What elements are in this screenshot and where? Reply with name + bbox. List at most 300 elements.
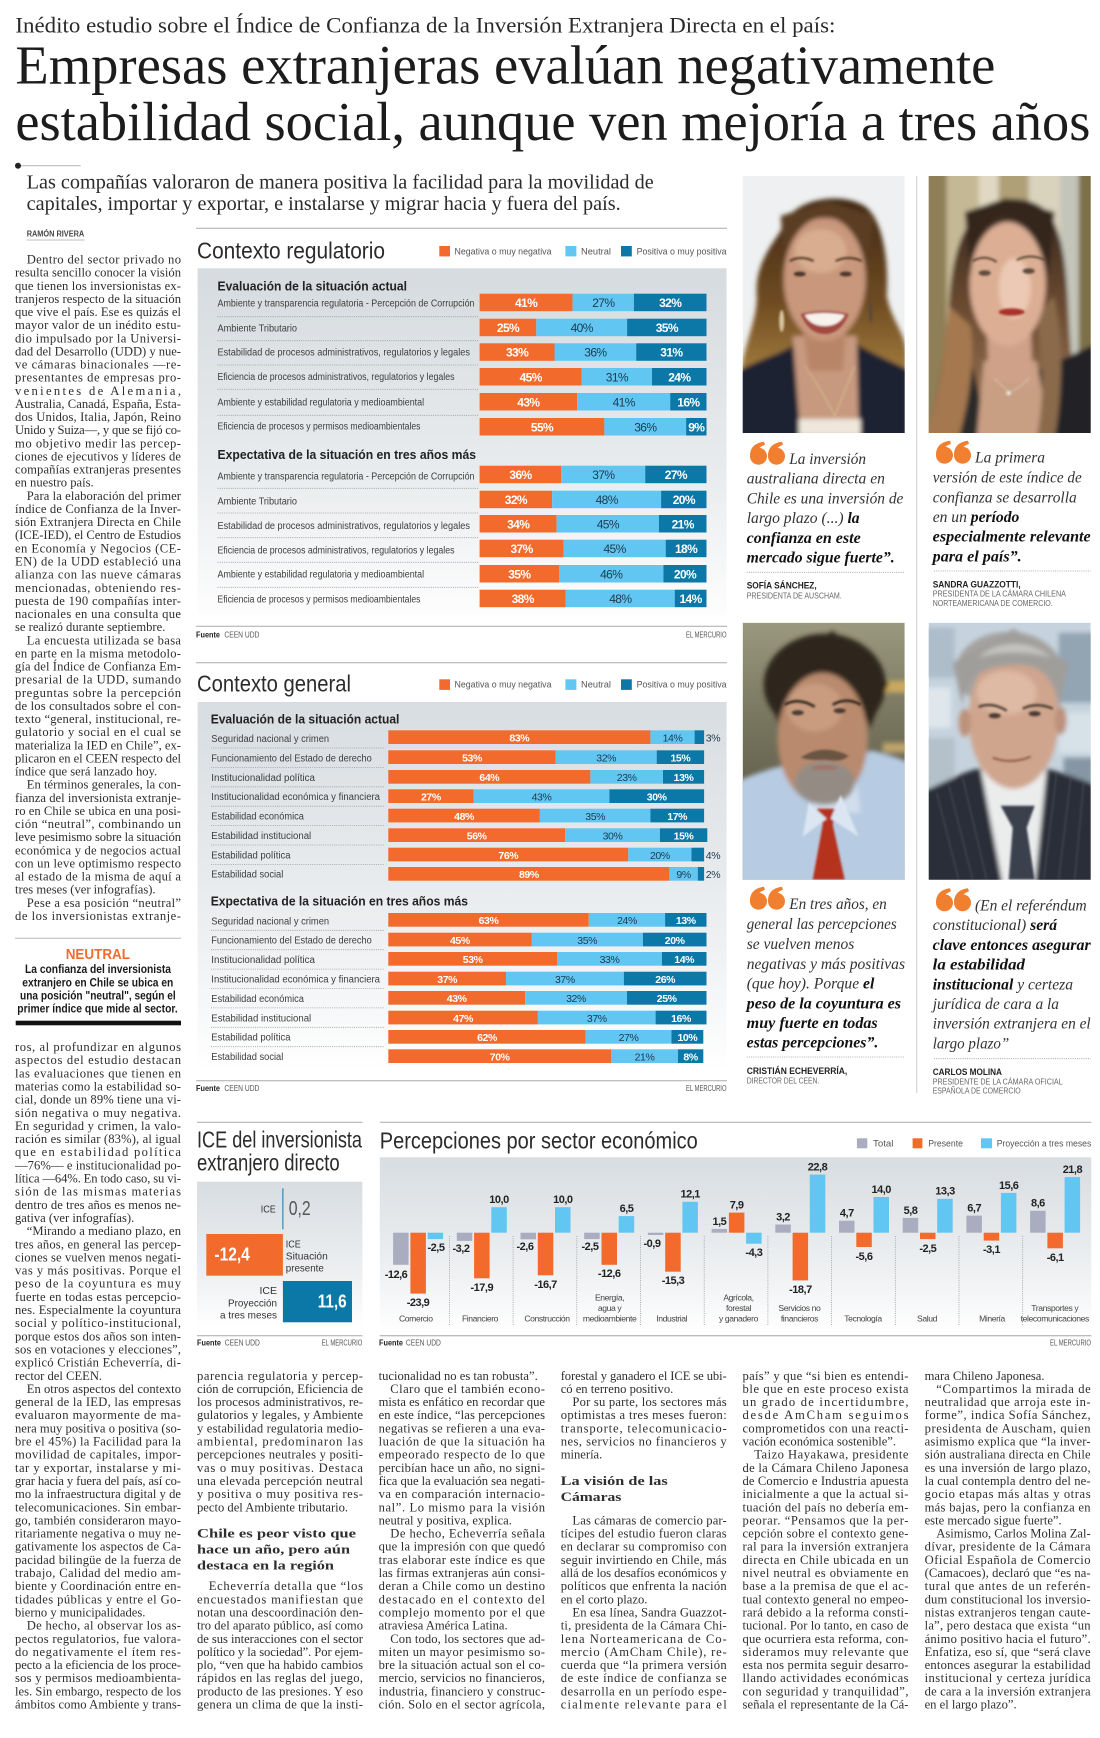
article column 6: Enfatiza, eso sí, que “será clave — [925, 1645, 1091, 1659]
article column 1, top: dio impulsado por la Universi- — [15, 331, 181, 345]
stacked bars: evaluación actual: 89% — [519, 869, 540, 881]
article column 2: tro del aparato público, así como — [197, 1619, 363, 1633]
article column 2: gulatorios y legales, y Ambiente — [197, 1408, 363, 1422]
quote: Cristián Echeverría: muy fuerte en todas — [747, 1015, 878, 1032]
article column 1, top: presentantes de empresas pro- — [15, 371, 181, 385]
category labels: agua y — [598, 1303, 622, 1313]
quote: Carlos Molina: CARLOS MOLINA — [933, 1067, 1002, 1077]
quote: Carlos Molina: institucional y certeza — [933, 976, 1073, 993]
category labels: Servicios no — [778, 1303, 821, 1313]
article column 4: cialmente relevante para el — [561, 1698, 727, 1712]
quote: Cristián Echeverría: peso de la coyuntura es — [745, 995, 901, 1012]
article column 2: parencia regulatoria y percep- — [197, 1369, 363, 1383]
value labels: -4,3 — [745, 1247, 763, 1259]
stacked bars: expectativa: 16% — [671, 1013, 692, 1025]
article column 5: rará debido a la reforma consti- — [742, 1606, 908, 1620]
article column 1, top: ciones de ejecutivos y líderes de — [15, 450, 181, 464]
article column 6 — [925, 1369, 1091, 1712]
category labels: Financiero — [462, 1313, 499, 1323]
stacked bars: expectativa: 32% — [566, 993, 586, 1005]
value labels — [385, 1162, 1082, 1309]
stacked bars: evaluación actual: 43% — [532, 792, 551, 804]
stacked bars: expectativa: 36% — [509, 468, 533, 482]
quote: Cristián Echeverría: En tres años, en — [788, 896, 887, 913]
stacked bars: expectativa: 25% — [657, 993, 678, 1005]
article column 5: señala el representante de la Cá- — [742, 1698, 908, 1712]
stacked bars: evaluación actual: 45% — [520, 370, 543, 384]
value labels: 21,8 — [1063, 1164, 1082, 1176]
photo: Cristián Echeverría — [739, 623, 909, 885]
row labels: evaluación actual: Institucionalidad política — [211, 773, 315, 784]
quote: Carlos Molina: constitucional) será — [933, 917, 1057, 934]
article column 1, top: venientes de Alemania, — [15, 384, 181, 398]
article column 1, top: preguntas sobre la percepción — [15, 686, 182, 700]
article column 1, bottom: ros, al profundizar en algunos — [15, 1040, 181, 1054]
row labels: evaluación actual: Ambiente Tributario — [218, 324, 297, 335]
source line — [197, 1339, 362, 1348]
row labels: evaluación actual: Ambiente y transparencia regulatoria - Percepción de Corrupción — [218, 299, 474, 310]
article column 3 — [379, 1369, 546, 1712]
row labels: evaluación actual: Eficiencia de procesos administrativos, regulatorios y legales — [218, 372, 454, 383]
stacked bars: evaluación actual: 31% — [660, 346, 683, 360]
article column 6: neutralidad que arroja este in- — [925, 1395, 1091, 1409]
photo: Sofía Sánchez — [739, 176, 909, 438]
article column 1, top: alianza con las nueve cámaras — [15, 568, 181, 582]
source line: Fuente — [196, 630, 220, 639]
row labels: expectativa: Estabilidad de procesos administrativos, regulatorios y legales — [218, 521, 470, 532]
article column 1, top: ro en Chile se ubica en una posi- — [15, 804, 181, 818]
panel: contexto regulatorio — [196, 228, 727, 639]
stacked bars: expectativa: 37% — [587, 1013, 607, 1025]
stacked bars: evaluación actual: 9% — [688, 420, 705, 434]
legend — [857, 1138, 1092, 1148]
article column 2: y estabilidad regulatoria medio- — [197, 1421, 363, 1435]
panel: ICE del inversionista — [197, 1122, 362, 1348]
article column 2: ambiental, predominaron las — [197, 1434, 363, 1448]
stacked bars: expectativa: 45% — [603, 542, 627, 556]
article column 1, bottom: pacidad bilingüe de la fuerza de — [15, 1553, 181, 1567]
stacked bars: expectativa — [388, 913, 706, 1064]
value labels: -2,5 — [428, 1242, 445, 1254]
category labels: Industrial — [656, 1313, 688, 1323]
stacked bars: evaluación actual: 64% — [479, 772, 500, 784]
value labels: -12,6 — [598, 1268, 621, 1280]
stacked bars: evaluación actual: 31% — [606, 370, 629, 384]
category labels: Agrícola, — [723, 1293, 754, 1303]
source line: EL MERCURIO — [686, 630, 726, 639]
value labels: -2,5 — [582, 1241, 599, 1253]
row labels: evaluación actual — [218, 299, 474, 432]
legend: Neutral — [581, 246, 611, 256]
stacked bars: expectativa: 18% — [675, 542, 698, 556]
article column 1, top: La encuesta utilizada se basa — [27, 633, 181, 647]
legend — [439, 679, 727, 690]
article column 1, top: Australia, Canadá, España, Esta- — [15, 397, 181, 411]
article column 3: neutral y positiva, explica. — [379, 1513, 512, 1527]
article column 6: (Camacoes), declaró que “es na- — [925, 1566, 1091, 1580]
article column 6: gocio etapas más altas y otras — [925, 1487, 1091, 1501]
stacked bars: expectativa: 32% — [505, 493, 528, 507]
article column 1, bottom: ámbitos como Ambiente y trans- — [15, 1698, 181, 1712]
quote: Sofía Sánchez: SOFÍA SÁNCHEZ, — [747, 581, 817, 591]
category labels: Tecnología — [844, 1313, 882, 1323]
article column 2: una elevada percepción neutral — [197, 1474, 364, 1488]
row labels: evaluación actual: Ambiente y estabilidad regulatoria y medioambiental — [218, 398, 424, 409]
category labels: Energía, — [595, 1293, 624, 1303]
article column 6: dívar, presidente de la Cámara — [925, 1540, 1091, 1554]
panel: percepciones por sector — [379, 1122, 1092, 1348]
deck: Las compañías valoraron de manera positiva la facilidad para la movilidad de — [27, 172, 654, 194]
row labels: evaluación actual: Estabilidad social — [211, 870, 283, 881]
article column 1, bottom: movilidad de capitales, impor- — [15, 1448, 181, 1462]
headline: Empresas extranjeras evalúan negativamente — [15, 34, 995, 96]
stacked bars: expectativa: 63% — [479, 915, 499, 927]
quote: Sandra Guazzotti: versión de este índice de — [933, 469, 1082, 486]
stacked bars: expectativa: 37% — [437, 974, 458, 986]
article column 4: lena Norteamericana de Co- — [561, 1632, 727, 1646]
article column 6: dum constitucional los inversio- — [925, 1592, 1091, 1606]
quote: Carlos Molina — [931, 888, 1092, 1095]
stacked bars: evaluación actual: 27% — [421, 792, 442, 804]
quote: Sofía Sánchez: largo plazo (...) la — [747, 510, 860, 527]
source line: CEEN UDD — [224, 630, 260, 639]
value labels: -23,9 — [407, 1297, 430, 1309]
ICE situación presente: ICE — [286, 1238, 301, 1250]
article column 1, bottom: tidades públicas y entre el Go- — [15, 1592, 181, 1606]
article column 6: forme”, indica Sofía Sánchez, — [925, 1408, 1091, 1422]
article column 3: Con todo, los sectores que ad- — [390, 1632, 545, 1646]
row labels: expectativa — [218, 472, 474, 605]
callout: neutral: NEUTRAL — [66, 947, 130, 963]
article column 1, top: fianza del inversionista extranje- — [15, 791, 181, 805]
ICE proyección — [220, 1281, 352, 1322]
category labels: Comercio — [399, 1313, 433, 1323]
stacked bars: expectativa: 20% — [674, 567, 697, 581]
article column 1, top: materializa la IED en Chile”, ex- — [15, 738, 181, 752]
heading: evaluación actual: Evaluación de la situación actual — [211, 711, 399, 726]
article column 1, top: En términos generales, la con- — [27, 778, 181, 792]
article column 1, bottom: aspectos del estudio destacan — [15, 1053, 182, 1067]
article column 4: optimistas a tres meses fueron: — [561, 1408, 727, 1422]
category labels: Salud — [917, 1313, 938, 1323]
article column 1, top: tres meses (ver infografías). — [15, 883, 156, 897]
article column 5: tual contexto general no empeo- — [742, 1592, 908, 1606]
stacked bars: expectativa: 27% — [665, 468, 688, 482]
legend: Negativa o muy negativa — [454, 680, 552, 690]
legend: Total — [873, 1138, 893, 1148]
row labels: expectativa: Institucionalidad económica y financiera — [211, 974, 380, 986]
article column 1, top: nacionales en una consulta que — [15, 607, 181, 621]
article column 1, bottom: De hecho, al observar los as- — [27, 1619, 181, 1633]
quote: Carlos Molina: PRESIDENTE DE LA CÁMARA OFICIAL — [933, 1077, 1063, 1086]
article column 1, bottom: dentro de tres años es menos ne- — [15, 1198, 181, 1212]
stacked bars: evaluación actual: 15% — [674, 830, 695, 842]
row labels: expectativa: Funcionamiento del Estado de derecho — [211, 936, 372, 947]
legend — [439, 246, 727, 256]
ICE value: 0,2 — [289, 1198, 311, 1220]
heading: percepciones: Percepciones por sector económico — [380, 1128, 698, 1154]
article column 1, top: (ICE-IED), el Centro de Estudios — [15, 528, 181, 542]
article column 1, bottom: sos en votaciones y elecciones”, — [15, 1342, 181, 1356]
article column 1, bottom: trabajo, Calidad del medio am- — [15, 1566, 181, 1580]
stacked bars: evaluación actual — [480, 294, 706, 436]
article column 6: “Compartimos la mirada de — [936, 1382, 1091, 1396]
quote: Sandra Guazzotti — [931, 441, 1091, 608]
stacked bars: expectativa: 21% — [672, 517, 695, 531]
stacked bars: evaluación actual: 40% — [571, 321, 594, 335]
stacked bars: expectativa: 35% — [577, 935, 597, 947]
article column 3: bre la situación actual son el co- — [379, 1658, 545, 1672]
article column 1, bottom: nes. Especialmente la coyuntura — [15, 1303, 181, 1317]
heading: evaluación actual: Evaluación de la situación actual — [218, 279, 407, 294]
article column 6: la cual contempla dentro del ne- — [925, 1474, 1091, 1488]
source line: Fuente — [379, 1339, 403, 1348]
headline — [15, 34, 1090, 152]
article column 3: De hecho, Echeverría señala — [390, 1527, 545, 1541]
quote: Sofía Sánchez — [747, 442, 904, 600]
row labels: expectativa: Eficiencia de procesos y permisos medioambientales — [218, 594, 420, 605]
article column 5: comprometidos con una reacti- — [742, 1421, 908, 1435]
value labels: -0,9 — [644, 1238, 661, 1250]
stacked bars: evaluación actual: 25% — [497, 321, 520, 335]
ICE situación presente: presente — [286, 1262, 324, 1274]
category labels: financieros — [781, 1313, 818, 1323]
article column 1, top: con un leve optimismo respecto — [15, 856, 181, 870]
article column 2: y positiva o muy positiva res- — [197, 1487, 363, 1501]
stacked bars: evaluación actual: 17% — [667, 811, 688, 823]
article column 5: ble que en este proceso exista — [742, 1382, 909, 1396]
subheading: Chile es peor visto: hace un año, pero aún — [197, 1543, 350, 1557]
heading: ICE — [197, 1127, 362, 1176]
stacked bars: expectativa: 8% — [683, 1052, 699, 1064]
article column 3: mista es enfático en recordar que — [379, 1395, 545, 1409]
article column 1, bottom: telecomunicaciones. Sin embar- — [15, 1500, 181, 1514]
article column 1, top: en parte en la misma metodolo- — [15, 646, 181, 660]
article column 1, bottom: go, también consideraron mayo- — [15, 1513, 181, 1527]
stacked bars: evaluación actual: 9% — [676, 869, 691, 881]
source line: EL MERCURIO — [322, 1339, 362, 1348]
article column 5: peorar. “Pensamos que la per- — [742, 1513, 908, 1527]
article column 1, bottom: lítica —64%. En todo caso, su vi- — [15, 1172, 181, 1186]
callout: neutral — [15, 938, 181, 1025]
ICE proyección: ICE — [259, 1285, 277, 1297]
source line — [196, 630, 726, 639]
stacked bars: expectativa: 37% — [510, 542, 534, 556]
stacked bars: evaluación actual: 32% — [596, 752, 616, 764]
row labels: evaluación actual: Eficiencia de procesos y permisos medioambientales — [218, 421, 420, 432]
stacked bars: evaluación actual: 13% — [674, 772, 695, 784]
quote: Sofía Sánchez: PRESIDENTA DE AUSCHAM. — [747, 591, 842, 600]
category labels — [399, 1293, 1089, 1323]
quote: Sandra Guazzotti: confianza se desarrolla — [933, 489, 1077, 506]
subheading: La visión de las Cámaras: Cámaras — [561, 1490, 622, 1504]
article column 5: un grado de incertidumbre, — [742, 1395, 908, 1409]
article column 1, bottom: pectos regulatorios, fue valora- — [15, 1632, 181, 1646]
legend: Proyección a tres meses — [997, 1138, 1092, 1148]
article column 1, bottom: que en estabilidad política — [15, 1145, 181, 1159]
article column 4: Las cámaras de comercio par- — [572, 1513, 727, 1527]
row labels: evaluación actual: Estabilidad institucional — [211, 831, 311, 842]
article column 3: ción. Solo en el sector agrícola, — [379, 1698, 545, 1712]
article column 6: entonces asegurar la estabilidad — [925, 1658, 1091, 1672]
article column 5: esta nos permita seguir desarro- — [742, 1658, 908, 1672]
value labels: -5,6 — [856, 1251, 873, 1263]
quote: Sandra Guazzotti: especialmente relevante — [933, 529, 1091, 546]
article column 4: cuerda que “la primera versión — [561, 1658, 727, 1672]
row labels: expectativa: Ambiente y estabilidad regulatoria y medioambiental — [218, 570, 424, 581]
article column 3: fica que la evaluación sea negati- — [379, 1474, 545, 1488]
article column 1, bottom: pecto a la eficiencia de los proce- — [15, 1658, 181, 1672]
value labels: -3,2 — [453, 1243, 470, 1255]
article column 1, top: gulatorio y social en el cual se — [15, 725, 181, 739]
article column 6: sión australiana directa en Chile — [925, 1448, 1091, 1462]
quote: Carlos Molina: jurídica de cara a la — [931, 996, 1059, 1013]
article column 1, top: mencionadas, obteniendo res- — [15, 581, 181, 595]
subheading: Chile es peor visto: Chile es peor visto que — [197, 1527, 357, 1541]
article column 3: deran a Chile como un destino — [379, 1579, 545, 1593]
article column 5: vación económica sostenible”. — [742, 1434, 896, 1448]
article column 3: industria, financiero y construc- — [379, 1684, 545, 1698]
quote: Carlos Molina: largo plazo” — [933, 1035, 1009, 1052]
row labels: expectativa: Estabilidad política — [211, 1033, 291, 1044]
article column 4: có en terreno positivo. — [561, 1382, 673, 1396]
article column 3: complejo momento por el que — [379, 1606, 545, 1620]
article column 1, bottom: sos y permisos medioambienta- — [15, 1671, 181, 1685]
category labels: y ganadero — [719, 1313, 759, 1323]
stacked bars: expectativa — [480, 466, 706, 607]
category labels: medioambiente — [583, 1313, 637, 1323]
deck: capitales, importar y exportar, e instalarse y migrar hacia y fuera del país. — [27, 194, 621, 215]
stacked bars: expectativa: 24% — [617, 915, 637, 927]
stacked bars: evaluación actual: 3% — [706, 732, 720, 744]
article column 6: es una inversión de largo plazo, — [925, 1461, 1091, 1475]
quote: Sandra Guazzotti: PRESIDENTA DE LA CÁMARA CHILENA — [933, 590, 1067, 599]
article column 1, bottom: explicó Cristián Echeverría, di- — [15, 1356, 181, 1370]
value labels: 13,3 — [935, 1186, 955, 1198]
article column 3: mercio, servicios no financieros, — [379, 1671, 545, 1685]
source line: EL MERCURIO — [686, 1084, 726, 1093]
article column 4: transporte, telecomunicacio- — [561, 1421, 727, 1435]
stacked bars: expectativa: 53% — [463, 954, 484, 966]
article column 5: con seguridad y tranquilidad”, — [742, 1684, 908, 1698]
stacked bars: expectativa: 20% — [665, 935, 686, 947]
article column 1, top: presarial de la UDD, sumando — [15, 673, 181, 687]
article column 6: la”, pero destaca que exista “un — [925, 1619, 1091, 1633]
marker: dot and rule — [15, 163, 81, 169]
article column 1, bottom: —76%— e institucionalidad po- — [14, 1158, 181, 1172]
stacked bars: expectativa: 33% — [600, 954, 619, 966]
subheading: Chile es peor visto — [197, 1527, 357, 1572]
article column 5: que ocurriera esta reforma, con- — [742, 1632, 908, 1646]
article column 1, top: que tienen los inversionistas ex- — [15, 279, 181, 293]
stacked bars: expectativa: 37% — [592, 468, 615, 482]
article column 2: percepciones neutrales y positi- — [197, 1448, 363, 1462]
quote: Sandra Guazzotti: SANDRA GUAZZOTTI, — [933, 579, 1021, 589]
row labels: evaluación actual — [211, 734, 380, 881]
article column 4: forestal y ganadero el ICE se ubi- — [561, 1369, 727, 1383]
article column 6: nistas extranjeros tengan caute- — [925, 1606, 1091, 1620]
quote: Cristián Echeverría: DIRECTOR DEL CEEN. — [747, 1076, 819, 1085]
article column 4: políticos que enfrenta la nación — [561, 1579, 727, 1593]
source line: Fuente — [197, 1339, 221, 1348]
quote: Sofía Sánchez: australiana directa en — [747, 471, 885, 488]
article column 2: rápidos en las reglas del juego, — [197, 1671, 363, 1685]
article column 3: percibían hace un año, no signi- — [379, 1461, 545, 1475]
stacked bars: expectativa: 43% — [447, 993, 468, 1005]
stacked bars: evaluación actual: 2% — [706, 869, 720, 881]
row labels: evaluación actual: Estabilidad política — [211, 850, 291, 861]
value labels: 6,5 — [620, 1203, 634, 1215]
category labels: Construcción — [524, 1313, 570, 1323]
stacked bars: evaluación actual: 56% — [467, 830, 488, 842]
article column 1, top: sión Extranjera Directa en Chile — [15, 515, 181, 529]
article column 1, bottom: bierno y municipalidades. — [15, 1606, 145, 1620]
row labels: expectativa — [211, 916, 380, 1063]
article column 6: en el largo plazo”. — [925, 1698, 1017, 1712]
article column 1, bottom: peso de la coyuntura es muy — [15, 1277, 182, 1291]
article column 6: este mercado sigue fuerte”. — [925, 1513, 1062, 1527]
article column 4: ti, presidenta de la Cámara Chi- — [561, 1619, 727, 1633]
stacked bars: evaluación actual: 36% — [584, 346, 607, 360]
article column 5: ral para la inversión extranjera — [742, 1540, 909, 1554]
article column 1, bottom: gativamente los aspectos de Ca- — [15, 1540, 181, 1554]
article column 4: en el corto plazo. — [561, 1592, 647, 1606]
stacked bars: expectativa: 62% — [477, 1032, 498, 1044]
stacked bars: evaluación actual: 14% — [663, 732, 682, 744]
article column 5: cepción sobre el contexto gene- — [742, 1527, 908, 1541]
heading: ICE: extranjero directo — [197, 1150, 340, 1176]
article column 1, top: EN) de la UDD estableció una — [15, 554, 181, 568]
row labels: evaluación actual: Institucionalidad económica y financiera — [211, 792, 380, 803]
article column 1, top: al estado de la misma de aquí a — [15, 870, 181, 884]
article column 4: minería. — [561, 1448, 602, 1462]
ICE situación presente — [206, 1234, 328, 1276]
heading: contexto general: Contexto general — [197, 671, 351, 697]
value labels: 10,0 — [489, 1194, 509, 1206]
article column 1, bottom: sión negativa o muy negativa. — [15, 1106, 181, 1120]
quote: Cristián Echeverría — [745, 887, 905, 1085]
article column 4: seguir invirtiendo en Chile, más — [561, 1553, 727, 1567]
article column 2: encuestados manifiestan que — [197, 1592, 363, 1606]
article column 1, top: resulta sencillo conocer la visión — [15, 266, 182, 280]
stacked bars: expectativa: 27% — [619, 1032, 639, 1044]
stacked bars: expectativa: 14% — [674, 954, 695, 966]
quote: Sofía Sánchez: Chile es una inversión de — [747, 490, 903, 508]
article column 5 — [742, 1369, 909, 1712]
article column 1, bottom: En otros aspectos del contexto — [27, 1382, 181, 1396]
stacked bars: expectativa: 46% — [600, 567, 623, 581]
article column 2: Echeverría detalla que “los — [209, 1579, 363, 1593]
stacked bars: expectativa: 35% — [508, 567, 531, 581]
stacked bars: expectativa: 21% — [635, 1052, 654, 1064]
quote: Carlos Molina: inversión extranjera en el — [933, 1016, 1091, 1033]
stacked bars: evaluación actual: 20% — [650, 850, 670, 862]
row labels: expectativa: Ambiente y transparencia regulatoria - Percepción de Corrupción — [218, 472, 474, 483]
value labels: -6,1 — [1047, 1252, 1064, 1264]
quote: Cristián Echeverría: (que hoy). Porque el — [747, 975, 875, 992]
article column 1, bottom: tar y exportar, instalarse y mi- — [15, 1461, 181, 1475]
article column 5: de la Cámara Chileno Japonesa — [742, 1461, 909, 1475]
quote: Carlos Molina: la estabilidad — [933, 957, 1025, 974]
subheading: La visión de las Cámaras: La visión de las — [561, 1474, 668, 1488]
article column 1, bottom: tres años, en general las percep- — [15, 1237, 181, 1251]
article column 5: Taizo Hayakawa, presidente — [754, 1448, 909, 1462]
quote: Cristián Echeverría: general las percepciones — [747, 916, 897, 933]
quote: Carlos Molina: clave entonces asegurar — [933, 937, 1092, 954]
source line — [196, 1084, 726, 1093]
quote: Cristián Echeverría: estas percepciones”. — [747, 1035, 878, 1052]
bars: proyección — [428, 1175, 1080, 1244]
